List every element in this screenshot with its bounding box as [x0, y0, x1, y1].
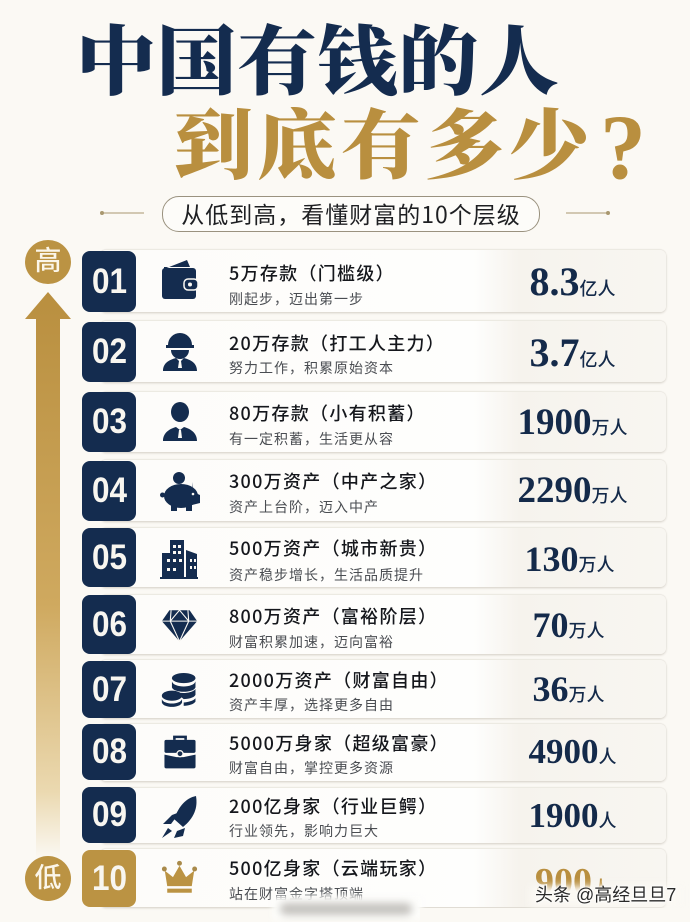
heading 09: 200亿身家（行业巨鳄）: [229, 793, 437, 819]
description 10: 站在财富金字塔顶端: [229, 884, 364, 904]
value 02: 3.7亿人: [530, 330, 616, 375]
row 01: 01: [91, 262, 127, 301]
icon: diamond: [162, 610, 198, 641]
watermark haze: [530, 886, 680, 906]
description 08: 财富自由，掌控更多资源: [229, 758, 394, 778]
row 02: [82, 320, 667, 384]
heading 10: 500亿身家（云端玩家）: [229, 855, 437, 881]
row 10: 10: [91, 859, 127, 898]
value 06: 70万人: [532, 605, 604, 645]
value 05: 130万人: [524, 539, 614, 579]
heading 07: 2000万资产（财富自由）: [229, 667, 449, 693]
description 05: 资产稳步增长，生活品质提升: [229, 565, 424, 585]
row 04: 04: [91, 471, 127, 510]
icon: businessman: [163, 402, 197, 441]
row 01: [82, 249, 667, 314]
description 09: 行业领先，影响力巨大: [229, 821, 379, 841]
heading 02: 20万存款（打工人主力）: [229, 330, 445, 356]
icon: coin stack: [162, 673, 196, 707]
value 01: 8.3亿人: [530, 259, 616, 304]
icon: crown: [162, 860, 198, 893]
icon: city buildings: [160, 540, 198, 579]
right ornament line: [566, 211, 610, 215]
row 04: [82, 459, 667, 523]
icon: wallet: [162, 260, 198, 299]
low marker: 低: [34, 863, 62, 893]
subtitle pill: 从低到高，看懂财富的10个层级: [181, 196, 521, 230]
icon: rocket: [162, 796, 196, 838]
heading 08: 5000万身家（超级富豪）: [229, 730, 449, 756]
bottom white fade: [420, 908, 690, 922]
title question mark: ?: [600, 96, 646, 198]
value 10: 900人: [535, 861, 610, 903]
row 10: [82, 848, 667, 909]
heading 06: 800万资产（富裕阶层）: [229, 603, 437, 629]
high marker: [25, 240, 71, 284]
row 09: [82, 787, 667, 845]
value 04: 2290万人: [518, 470, 628, 511]
row 03: [82, 391, 667, 454]
value 08: 4900人: [528, 732, 616, 771]
row 02: 02: [91, 332, 127, 371]
value 09: 1900人: [528, 796, 616, 835]
icon: briefcase: [164, 736, 196, 768]
icon: piggy bank: [160, 472, 200, 511]
row 05: [82, 527, 667, 589]
row 07: [82, 659, 667, 720]
row 03: 03: [91, 402, 127, 441]
heading 05: 500万资产（城市新贵）: [229, 535, 437, 561]
row 06: 06: [91, 605, 127, 644]
description 07: 资产丰厚，选择更多自由: [229, 695, 394, 715]
value 03: 1900万人: [518, 402, 628, 443]
description 02: 努力工作，积累原始资本: [229, 358, 394, 378]
description 04: 资产上台阶，迈入中产: [229, 497, 379, 517]
left ornament line: [100, 211, 144, 215]
row 08: 08: [91, 732, 127, 771]
description 01: 刚起步，迈出第一步: [229, 289, 364, 309]
title line 1: 中国有钱的人: [76, 22, 560, 106]
row 09: 09: [91, 795, 127, 834]
heading 01: 5万存款（门槛级）: [229, 260, 395, 286]
title line 2: 到底有多少: [173, 106, 593, 190]
icon: worker with helmet: [163, 333, 197, 371]
row 06: [82, 594, 667, 656]
watermark: 头条 @高经旦旦7: [535, 885, 676, 905]
upward arrow: [25, 292, 71, 852]
white smudge over description: [272, 896, 422, 920]
heading 03: 80万存款（小有积蓄）: [229, 400, 426, 426]
description 03: 有一定积蓄，生活更从容: [229, 429, 394, 449]
high marker: 高: [34, 246, 62, 276]
value 07: 36万人: [532, 669, 604, 709]
low marker: [25, 856, 71, 901]
row 08: [82, 723, 667, 783]
heading 04: 300万资产（中产之家）: [229, 468, 437, 494]
row 05: 05: [91, 538, 127, 577]
row 07: 07: [91, 670, 127, 709]
bottom blurred smudge: [280, 903, 412, 915]
description 06: 财富积累加速，迈向富裕: [229, 632, 394, 652]
